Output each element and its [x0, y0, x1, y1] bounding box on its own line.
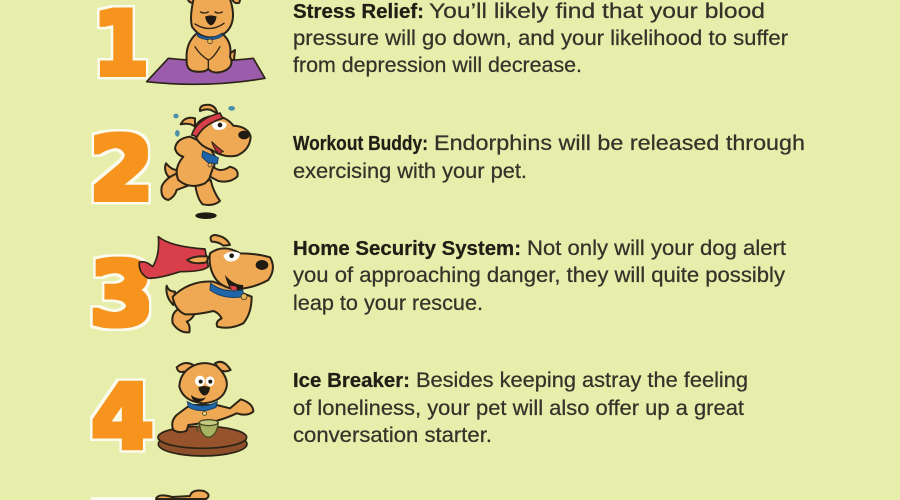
text block: ice breaker: Ice Breaker:	[293, 370, 410, 392]
text block: stress relief: Stress Relief:	[293, 1, 424, 23]
text block: ice breaker: Besides keeping astray the feeling	[416, 369, 748, 392]
icon: yoga dog on mat	[147, 0, 265, 84]
number 2: 2	[89, 118, 154, 220]
text block: home security system: Home Security System:	[293, 238, 521, 260]
icon: flying superhero dog with cape	[139, 235, 273, 332]
text block: workout buddy: Endorphins will be released through	[434, 132, 805, 155]
text block: home security system: leap to your rescue.	[293, 292, 483, 315]
icon: jogging dog with headband	[161, 105, 251, 219]
text block: stress relief	[293, 0, 788, 77]
text block: ice breaker: conversation starter.	[293, 424, 492, 447]
text block: ice breaker: of loneliness, your pet will also offer up a great	[293, 397, 744, 420]
text block: workout buddy: exercising with your pet.	[293, 160, 527, 183]
text block: stress relief: pressure will go down, and your likelihood to suffer	[293, 27, 788, 50]
text block: workout buddy	[293, 132, 805, 183]
text block: ice breaker	[293, 369, 748, 447]
icon: dog ears (cropped fifth dog)	[156, 491, 209, 499]
text block: stress relief: from depression will decrease.	[293, 54, 582, 77]
text block: home security system	[293, 237, 786, 315]
number 3: 3	[89, 243, 154, 346]
text block: stress relief: You’ll likely find that your blood	[429, 0, 765, 23]
number 4: 4	[91, 366, 154, 468]
number 5 top edge (cropped)	[91, 497, 155, 500]
text block: workout buddy: Workout Buddy:	[293, 133, 428, 155]
text block: home security system: you of approaching danger, they will quite possibly	[293, 264, 786, 287]
icon: coffee dog at table	[158, 362, 253, 456]
text block: home security system: Not only will your dog alert	[527, 237, 786, 260]
